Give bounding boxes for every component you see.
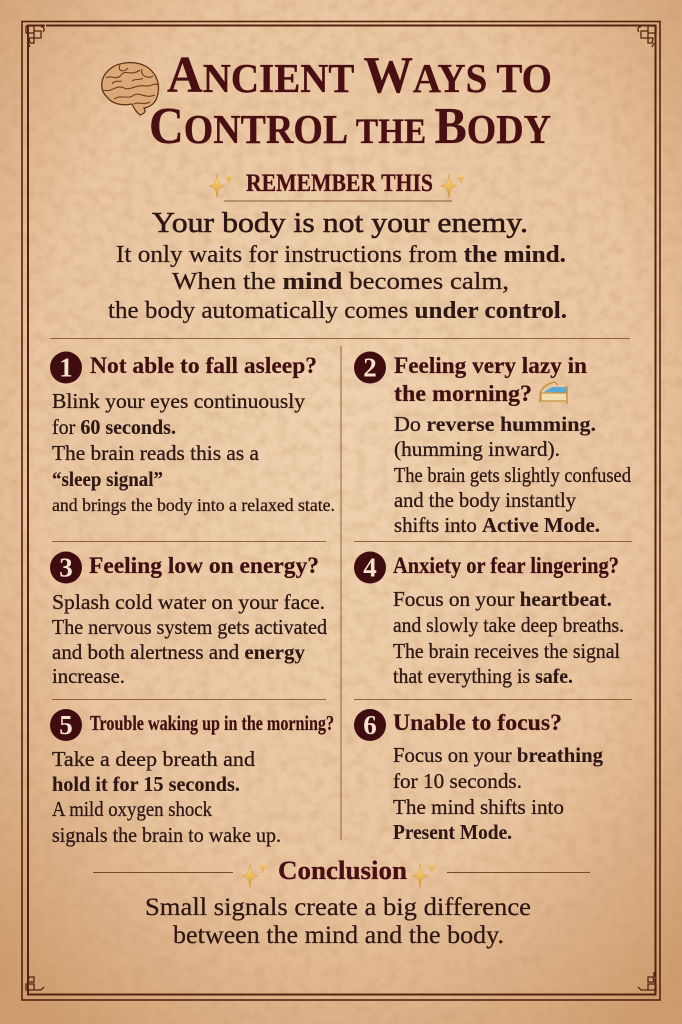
panel: tip 4: Focus on your heartbeat. [393, 587, 612, 611]
panel: tip 3: Splash cold water on your face. [52, 590, 325, 614]
panel: tip 2: The brain gets slightly confused [394, 463, 631, 487]
panel: tip 2: (humming inward). [394, 437, 560, 461]
panel: tip 6: 6 [363, 710, 377, 740]
panel: tip 2: Feeling very lazy in [394, 353, 587, 378]
intro text block [108, 208, 567, 324]
panel: tip 3: 3 [59, 552, 73, 582]
icon: bed [540, 382, 567, 404]
panel: tip 6 [354, 709, 603, 844]
panel: tip 5: 5 [59, 710, 73, 740]
panel: tip 4 [354, 552, 624, 688]
conclusion text: Small signals create a big difference [145, 894, 531, 921]
panel: tip 5: hold it for 15 seconds. [52, 772, 240, 796]
corner ornament: top left [26, 26, 44, 47]
intro text block: It only waits for instructions from the mind. [116, 242, 566, 268]
conclusion text [145, 894, 531, 949]
icon: brain [102, 63, 159, 115]
title [149, 47, 552, 155]
panel: tip 3 [50, 552, 327, 688]
title: CONTROL THE BODY [149, 98, 551, 155]
panel: tip 1: and brings the body into a relaxed state. [52, 495, 335, 515]
panel: tip 1 [50, 352, 335, 515]
panel: tip 6: Unable to focus? [393, 710, 562, 735]
heading: remember this: REMEMBER THIS [246, 170, 433, 197]
conclusion text: between the mind and the body. [173, 922, 504, 949]
panel: tip 2: Do reverse humming. [394, 412, 596, 436]
panel: tip 3: The nervous system gets activated [52, 615, 327, 639]
panel: tip 6: The mind shifts into [393, 795, 564, 819]
title: ANCIENT WAYS TO [167, 47, 552, 104]
heading: conclusion [93, 856, 590, 888]
panel: tip 5: Take a deep breath and [52, 747, 256, 771]
panel: tip 5: signals the brain to wake up. [52, 823, 281, 847]
panel: tip 2: 2 [363, 352, 377, 382]
intro text block: Your body is not your enemy. [152, 208, 528, 239]
panel: tip 2: shifts into Active Mode. [394, 513, 600, 537]
panel: tip 5: Trouble waking up in the morning? [90, 711, 334, 735]
panel: tip 1: 1 [59, 352, 73, 382]
panel: tip 1: “sleep signal” [52, 467, 163, 491]
panel: tip 6: Focus on your breathing [393, 743, 603, 767]
panel: tip 1: for 60 seconds. [52, 415, 176, 439]
panel: tip 4: Anxiety or fear lingering? [393, 553, 619, 578]
panel: tip 4: and slowly take deep breaths. [393, 613, 624, 637]
panel: tip 2: the morning? [394, 381, 532, 406]
panel: tip 3: and both alertness and energy [52, 640, 305, 664]
panel: tip 4: The brain receives the signal [393, 639, 620, 663]
panel: tip 3: increase. [52, 664, 125, 688]
panel: tip 2: and the body instantly [394, 488, 576, 512]
heading: conclusion: Conclusion [278, 856, 408, 885]
panel: tip 4: 4 [363, 552, 377, 582]
panel: tip 1: Not able to fall asleep? [90, 353, 317, 378]
panel: tip 1: The brain reads this as a [52, 441, 260, 465]
panel: tip 2 [354, 352, 631, 537]
intro text block: the body automatically comes under control. [108, 298, 567, 324]
panel: tip 3: Feeling low on energy? [89, 553, 319, 578]
panel: tip 4: that everything is safe. [393, 664, 573, 688]
panel: tip 5: A mild oxygen shock [52, 797, 212, 821]
panel: tip 5 [50, 709, 334, 847]
panel: tip 1: Blink your eyes continuously [52, 389, 306, 413]
panel: tip 6: for 10 seconds. [393, 769, 522, 793]
panel: tip 6: Present Mode. [393, 820, 512, 844]
intro text block: When the mind becomes calm, [172, 269, 509, 295]
